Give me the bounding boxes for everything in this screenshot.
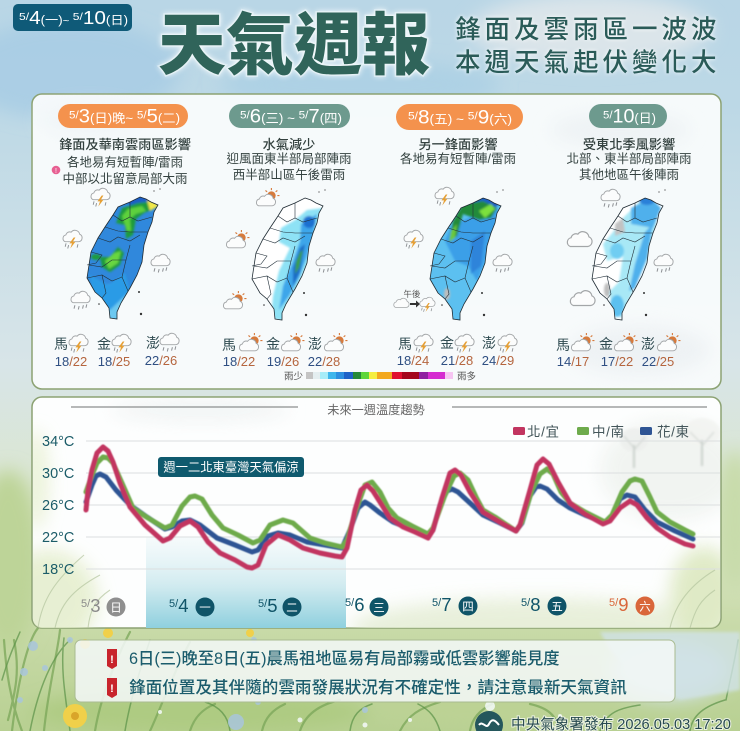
outlying islands 4: 22/25 bbox=[642, 354, 674, 369]
line: north Yilan bbox=[86, 447, 693, 568]
x axis date labels: 5/ bbox=[432, 597, 442, 609]
text: forecast summary 3: 另一鋒面影響 bbox=[418, 136, 498, 152]
outlying islands 3 bbox=[397, 334, 517, 368]
date pill 5/10: 10 bbox=[613, 106, 634, 128]
date range badge: (一) ~ bbox=[41, 15, 69, 27]
icon: sun west bbox=[226, 230, 249, 248]
notice 2: 鋒面位置及其伴隨的雲雨發展狀況有不確定性，請注意最新天氣資訊 bbox=[129, 677, 627, 697]
outlying islands 4 bbox=[556, 333, 680, 369]
rain map 4 bbox=[592, 189, 666, 320]
notice 1: ! bbox=[110, 654, 114, 666]
date range badge: 10 bbox=[83, 8, 106, 28]
date pill 5/6-5/7 bbox=[229, 104, 350, 128]
x axis date labels: 5/ bbox=[609, 597, 619, 609]
rain map 2 bbox=[252, 189, 326, 320]
grass and flowers bbox=[2, 628, 740, 731]
x axis date labels: 4 bbox=[178, 595, 188, 616]
panel: weekly rain forecast bbox=[32, 94, 721, 389]
outlying islands 3: 21/28 bbox=[441, 353, 473, 368]
outlying islands 1: 18/22 bbox=[55, 354, 87, 369]
chart legend bbox=[513, 424, 690, 440]
text: forecast summary 3: 各地易有短暫陣/雷雨 bbox=[400, 151, 516, 166]
date pill 5/8-5/9: 9 bbox=[478, 108, 489, 128]
y axis labels: 34°C bbox=[42, 434, 74, 450]
notice box bbox=[75, 640, 675, 702]
afternoon change note bbox=[394, 289, 435, 312]
x axis date labels: 5/ bbox=[345, 597, 355, 609]
date pill 5/3-5/5: 3 bbox=[79, 106, 90, 128]
outlying islands 3: 金 bbox=[440, 335, 454, 351]
text: forecast summary 1: 鋒面及華南雲雨區影響 bbox=[59, 136, 191, 152]
shaded band: Mon Tue bbox=[146, 537, 346, 628]
column: 5/8 to 5/9 bbox=[394, 104, 523, 368]
outlying islands 3: 24/29 bbox=[482, 353, 514, 368]
date range badge: (日) bbox=[106, 15, 128, 27]
date pill 5/3-5/5: 5 bbox=[147, 106, 158, 128]
outlying islands 1: 18/25 bbox=[98, 354, 130, 369]
x axis date labels: 日 bbox=[110, 602, 122, 614]
outlying islands 4: 馬 bbox=[556, 337, 570, 353]
footer: publisher bbox=[475, 711, 731, 731]
icon: sun north bbox=[256, 188, 279, 206]
outlying islands 2: 18/22 bbox=[223, 354, 255, 369]
column: 5/3 to 5/5 bbox=[52, 104, 191, 369]
text: forecast summary 4: 其他地區午後陣雨 bbox=[579, 168, 679, 182]
outlying islands 1: 金 bbox=[97, 336, 111, 352]
chart heading: 未來一週溫度趨勢 bbox=[327, 402, 425, 417]
rainfall colour legend bbox=[284, 370, 476, 382]
outlying islands 4: 17/22 bbox=[601, 354, 633, 369]
subtitle bbox=[455, 16, 721, 77]
outlying islands 2: 馬 bbox=[222, 337, 236, 353]
panel: temperature trend bbox=[31, 396, 722, 629]
column: 5/6 to 5/7 bbox=[222, 104, 352, 369]
x axis date labels: 六 bbox=[639, 600, 651, 614]
outlying islands 2 bbox=[222, 333, 347, 369]
rain map 3 bbox=[430, 189, 504, 320]
outlying islands 1: 22/26 bbox=[145, 353, 177, 368]
rain map 1 bbox=[86, 188, 161, 320]
date range badge: 4 bbox=[29, 8, 41, 28]
subtitle: 本週天氣起伏變化大 bbox=[455, 49, 721, 77]
outlying islands 4: 金 bbox=[599, 336, 613, 352]
x axis date labels: 5/ bbox=[521, 597, 531, 609]
date range badge bbox=[13, 4, 132, 31]
outlying islands 4: 澎 bbox=[641, 336, 655, 352]
line chart bbox=[86, 447, 693, 568]
icon: rain east bbox=[654, 254, 673, 272]
y axis labels bbox=[42, 434, 74, 578]
text: forecast summary 1: 中部以北留意局部大雨 bbox=[62, 171, 188, 186]
icon: thunder west bbox=[404, 230, 423, 248]
text: forecast summary 2: 西半部山區午後雷雨 bbox=[233, 167, 345, 182]
icon: thunder west bbox=[63, 230, 82, 248]
date range badge: 5/ bbox=[19, 11, 29, 23]
outlying islands 2: 澎 bbox=[308, 336, 322, 352]
line: Hualien Taitung bbox=[86, 474, 693, 552]
date pill 5/3-5/5: 5/ bbox=[137, 110, 148, 122]
icon: cloud west bbox=[567, 232, 592, 246]
outlying islands 1: 馬 bbox=[54, 336, 68, 352]
chart gridlines bbox=[86, 441, 720, 569]
date pill 5/3-5/5 bbox=[58, 104, 188, 128]
text: forecast summary 2: 水氣減少 bbox=[263, 136, 315, 152]
text: forecast summary 1 bbox=[59, 136, 191, 186]
x axis date labels: 一 bbox=[199, 602, 211, 614]
icon: rain east bbox=[151, 254, 170, 272]
date pill 5/8-5/9 bbox=[396, 104, 523, 130]
x axis date labels: 三 bbox=[373, 602, 385, 614]
x axis date labels: 3 bbox=[90, 595, 100, 616]
icon: thunder north bbox=[91, 188, 110, 206]
y axis labels: 22°C bbox=[42, 530, 74, 546]
x axis date labels: 6 bbox=[354, 594, 364, 615]
date pill 5/10: 5/ bbox=[603, 110, 613, 122]
text: forecast summary 4 bbox=[566, 136, 692, 182]
x axis date labels: 5/ bbox=[169, 598, 179, 610]
y axis labels: 30°C bbox=[42, 466, 74, 482]
outlying islands 2: 22/28 bbox=[308, 354, 340, 369]
chart legend: 北/宜 bbox=[527, 424, 560, 440]
outlying islands 1: 澎 bbox=[146, 335, 160, 351]
date pill 5/6-5/7: 5/ bbox=[299, 110, 309, 122]
icon: sun south-west bbox=[223, 291, 246, 309]
x axis date labels: 5/ bbox=[81, 598, 91, 610]
outlying islands 2: 19/26 bbox=[267, 354, 299, 369]
notice 2: ! bbox=[110, 683, 114, 695]
x axis date labels: 5 bbox=[267, 595, 277, 616]
notice 1: 6日(三)晚至8日(五)晨馬祖地區易有局部霧或低雲影響能見度 bbox=[129, 649, 560, 668]
icon: rain east bbox=[316, 254, 335, 272]
date pill 5/10: (日) bbox=[634, 112, 656, 126]
date pill 5/6-5/7: (三) ~ bbox=[261, 112, 299, 126]
icon: rain north bbox=[601, 189, 620, 208]
outlying islands 1 bbox=[54, 333, 179, 369]
rainfall colour legend: 雨少 bbox=[284, 372, 304, 382]
afternoon change note: 午後 bbox=[403, 289, 421, 299]
date pill 5/8-5/9: (五) ~ bbox=[430, 112, 468, 126]
text: forecast summary 4: 北部、東半部局部陣雨 bbox=[566, 151, 692, 166]
rainfall colour legend: 雨多 bbox=[457, 370, 476, 382]
date pill 5/8-5/9: (六) bbox=[489, 112, 512, 126]
x axis date labels: 5/ bbox=[258, 598, 268, 610]
callout: cool Mon Tue: 週一二北東臺灣天氣偏涼 bbox=[163, 460, 299, 474]
outlying islands 4: 14/17 bbox=[557, 354, 589, 369]
text: forecast summary 3 bbox=[400, 136, 516, 166]
date pill 5/3-5/5: (二) bbox=[158, 112, 180, 126]
chart legend: 中/南 bbox=[592, 424, 625, 440]
icon: alert dot: ! bbox=[55, 168, 57, 175]
outlying islands 3: 18/24 bbox=[397, 353, 429, 368]
outlying islands 2: 金 bbox=[266, 336, 280, 352]
x axis date labels: 7 bbox=[441, 594, 451, 615]
chart legend: 花/東 bbox=[657, 424, 690, 440]
date pill 5/6-5/7: 5/ bbox=[240, 110, 251, 122]
text: forecast summary 2 bbox=[226, 136, 352, 182]
date pill 5/3-5/5: (日)晚~ bbox=[90, 112, 137, 126]
x axis date labels: 四 bbox=[462, 602, 474, 614]
icon: rain east bbox=[493, 254, 512, 272]
y axis labels: 26°C bbox=[42, 498, 74, 514]
x axis date labels: 8 bbox=[530, 594, 540, 615]
date pill 5/8-5/9: 8 bbox=[418, 108, 430, 128]
x axis date labels bbox=[81, 594, 654, 616]
date pill 5/8-5/9: 5/ bbox=[468, 110, 479, 122]
icon: rain south-west bbox=[71, 291, 90, 310]
text: forecast summary 4: 受東北季風影響 bbox=[583, 136, 675, 152]
x axis date labels: 9 bbox=[618, 594, 628, 615]
outlying islands 3: 馬 bbox=[398, 336, 412, 352]
date range badge: 5/ bbox=[69, 11, 83, 23]
icon: alert dot bbox=[52, 166, 60, 175]
subtitle: 鋒面及雲雨區一波波 bbox=[455, 16, 721, 44]
text: forecast summary 2: 迎風面東半部局部陣雨 bbox=[226, 151, 352, 166]
date pill 5/6-5/7: (四) bbox=[320, 112, 342, 126]
text: forecast summary 1: 各地易有短暫陣/雷雨 bbox=[67, 154, 183, 170]
date pill 5/6-5/7: 7 bbox=[308, 106, 320, 128]
column: 5/10 bbox=[556, 104, 692, 369]
x axis date labels: 二 bbox=[286, 602, 298, 614]
icon: cloud south-west bbox=[570, 291, 595, 306]
date pill 5/8-5/9: 5/ bbox=[408, 110, 419, 122]
x axis date labels: 五 bbox=[551, 602, 563, 614]
icon: agency logo bbox=[475, 711, 503, 731]
line: central south bbox=[86, 457, 693, 547]
callout: cool Mon Tue bbox=[158, 457, 304, 477]
date pill 5/10 bbox=[589, 104, 667, 128]
y axis labels: 18°C bbox=[42, 562, 74, 578]
outlying islands 3: 澎 bbox=[482, 335, 496, 351]
icon: thunder north bbox=[435, 187, 454, 206]
title: 天氣週報 bbox=[158, 8, 430, 84]
date pill 5/6-5/7: 6 bbox=[250, 106, 261, 128]
date pill 5/3-5/5: 5/ bbox=[69, 110, 80, 122]
